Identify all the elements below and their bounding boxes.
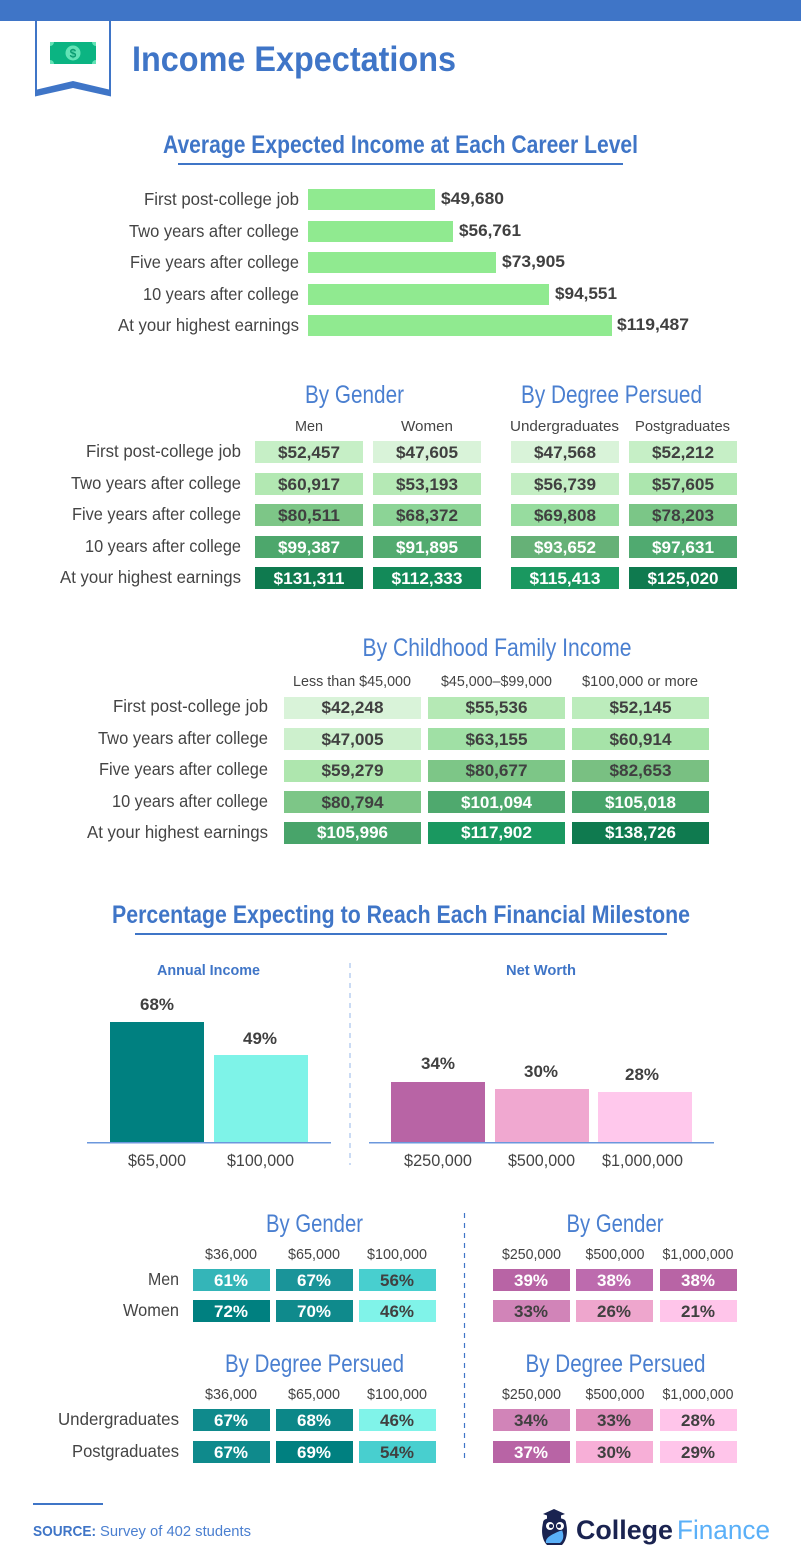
row: women: Women [123,1300,179,1320]
row: first post-college job: First post-college job [86,441,241,461]
row: 10 years after college: $105,018 [605,793,676,812]
column headers: Undergraduates [510,418,619,435]
row: first post-college job: $42,248 [322,698,384,717]
row: postgraduates: 67% [214,1443,248,1462]
bar chart: net worth: 28% [625,1065,659,1084]
bar chart: net worth: $1,000,000 [602,1151,683,1170]
row: at your highest earnings: $112,333 [392,569,462,588]
row: women [123,1300,436,1322]
column headers: degree: $500,000 [586,1386,644,1403]
row: five years after college: $59,279 [322,761,384,780]
heading: by gender: By Gender [266,1210,363,1238]
bar chart: net worth: $250,000 [404,1151,472,1170]
row: first post-college job: $47,605 [396,443,458,462]
bar chart: average expected income [118,189,689,336]
row: five years after college [99,759,709,782]
row: five years after college: Five years after college [72,504,241,524]
row: 10 years after college: $93,652 [534,538,596,557]
column headers: Less than $45,000 [293,673,411,690]
row: postgraduates: Postgraduates [72,1441,179,1461]
row: first post-college job: $55,536 [466,698,528,717]
header bar [0,0,801,21]
bar chart: annual income: 68% [140,995,174,1014]
bar: at your highest earnings [118,315,689,336]
row: at your highest earnings: $115,413 [530,569,600,588]
row: women: 70% [297,1302,331,1321]
column headers [295,418,730,435]
column headers: gender: $65,000 [288,1246,340,1263]
bar: first post-college job [144,189,504,210]
heading: by childhood family income: By Childhood Family Income [362,634,632,662]
row: men: 67% [297,1271,331,1290]
bar chart: annual income: $100,000 [227,1151,294,1170]
table: net worth milestones [493,1210,737,1463]
bar: at your highest earnings: At your highest earnings [118,315,299,335]
row: undergraduates: 46% [380,1411,414,1430]
row: undergraduates: Undergraduates [58,1409,179,1429]
row: undergraduates [493,1409,737,1431]
row: undergraduates: 33% [597,1411,631,1430]
row: undergraduates: 67% [214,1411,248,1430]
row: postgraduates: 69% [297,1443,331,1462]
row: first post-college job: $52,145 [610,698,672,717]
bar chart: net worth: Net Worth [506,963,576,979]
row: women: 72% [214,1302,248,1321]
column headers: gender: $500,000 [586,1246,644,1263]
bar chart: net worth: 30% [524,1062,558,1081]
column headers: gender: $250,000 [502,1246,561,1263]
column headers [293,673,698,690]
row: women: 21% [681,1302,715,1321]
heading: by degree persued: By Degree Persued [225,1350,404,1378]
column headers: degree: $36,000 [205,1386,257,1403]
title: Income Expectations [132,40,456,79]
row: men: 39% [514,1271,548,1290]
table: income by gender and degree [60,381,737,589]
row: 10 years after college: $91,895 [396,538,458,557]
row: five years after college: $80,511 [278,506,340,525]
column headers: Women [401,418,453,435]
column headers: gender: $36,000 [205,1246,257,1263]
row: first post-college job: $52,457 [278,443,340,462]
bar: five years after college: Five years after college [130,252,299,272]
bar: 10 years after college: $94,551 [555,284,617,303]
column headers: degree: $100,000 [367,1386,427,1403]
column headers: Men [295,418,323,435]
logo: CollegeFinance [542,1509,770,1545]
heading: average expected income: Average Expected Income at Each Career Level [163,131,638,159]
bar: two years after college: Two years after college [129,221,299,241]
row: men: 61% [214,1271,248,1290]
row: at your highest earnings: $105,996 [317,823,388,842]
row: five years after college: $82,653 [610,761,672,780]
icon: owl with graduation cap [542,1509,567,1545]
heading: by degree persued: By Degree Persued [526,1350,706,1378]
row: five years after college [72,504,737,526]
column headers: gender [502,1246,734,1263]
row: men: Men [148,1269,179,1289]
row: two years after college: $47,005 [322,730,384,749]
row: at your highest earnings: $138,726 [605,823,676,842]
column headers: gender: $100,000 [367,1246,427,1263]
column headers: $100,000 or more [582,673,698,690]
bar chart: annual income [87,963,331,1170]
logo: CollegeFinance: College [576,1515,673,1545]
row: two years after college [98,728,709,750]
row: first post-college job [113,696,709,719]
row: 10 years after college [112,791,709,813]
bar: first post-college job: First post-college job [144,189,299,209]
bar chart: annual income: 49% [243,1029,277,1048]
row: first post-college job: $47,568 [534,443,596,462]
row: two years after college: Two years after college [71,473,241,493]
row: men [148,1269,436,1291]
row: two years after college: $57,605 [652,475,714,494]
row: undergraduates: 68% [297,1411,331,1430]
bar chart: net worth [369,963,714,1170]
row: postgraduates: 37% [514,1443,548,1462]
bar: five years after college [130,252,565,273]
bar: at your highest earnings: $119,487 [617,315,689,334]
row: postgraduates [493,1441,737,1463]
heading: by gender: By Gender [566,1210,664,1238]
row: two years after college: Two years after college [98,728,268,748]
row: postgraduates: 54% [380,1443,414,1462]
column headers: degree [205,1386,427,1403]
bar: 10 years after college [143,284,617,305]
row: five years after college: Five years after college [99,759,268,779]
row: men [493,1269,737,1291]
row: at your highest earnings [87,822,709,844]
bar: five years after college: $73,905 [502,252,565,271]
row: five years after college: $78,203 [652,506,714,525]
row: 10 years after college: 10 years after college [112,791,268,811]
source note: Survey of 402 students [100,1523,251,1540]
row: two years after college: $56,739 [534,475,596,494]
row: 10 years after college: $97,631 [652,538,714,557]
row: postgraduates: 29% [681,1443,715,1462]
bar: first post-college job: $49,680 [441,189,504,208]
row: 10 years after college: $101,094 [461,793,533,812]
row: five years after college: $80,677 [466,761,528,780]
row: 10 years after college: $80,794 [322,793,384,812]
heading: percentage expecting to reach each financial milestone: Percentage Expecting to Reach Each Financial Milestone [112,901,690,929]
row: postgraduates [72,1441,436,1463]
row: first post-college job [86,441,737,463]
column headers: gender [205,1246,427,1263]
row: women: 26% [597,1302,631,1321]
row: men: 38% [597,1271,631,1290]
row: 10 years after college [85,536,737,558]
bar chart: net worth: $500,000 [508,1151,575,1170]
bar chart: annual income: $65,000 [128,1151,186,1170]
heading: by degree persued: By Degree Persued [521,381,702,409]
row: at your highest earnings: $131,311 [274,569,344,588]
icon: ribbon with dollar bill: $ [70,46,77,60]
source note [33,1503,251,1540]
row: five years after college: $68,372 [396,506,458,525]
row: men: 38% [681,1271,715,1290]
heading: by gender: By Gender [305,381,404,409]
bar chart: annual income: Annual Income [157,963,260,979]
row: first post-college job: $52,212 [652,443,714,462]
row: men: 56% [380,1271,414,1290]
row: at your highest earnings: $117,902 [461,823,532,842]
row: women: 46% [380,1302,414,1321]
row: at your highest earnings: At your highest earnings [60,567,241,587]
bar chart: net worth: 34% [421,1054,455,1073]
column headers: degree: $65,000 [288,1386,340,1403]
row: two years after college: $60,917 [278,475,340,494]
bar: two years after college [129,221,521,242]
row: at your highest earnings: $125,020 [648,569,718,588]
row: two years after college [71,473,737,495]
row: two years after college: $63,155 [466,730,528,749]
column headers: gender: $1,000,000 [662,1246,734,1263]
row: two years after college: $60,914 [610,730,672,749]
row: undergraduates: 28% [681,1411,715,1430]
column headers: $45,000–$99,000 [441,673,552,690]
bar: two years after college: $56,761 [459,221,521,240]
row: two years after college: $53,193 [396,475,458,494]
column headers: Postgraduates [635,418,730,435]
row: undergraduates: 34% [514,1411,548,1430]
row: undergraduates [58,1409,436,1431]
column headers: degree [502,1386,734,1403]
row: postgraduates: 30% [597,1443,631,1462]
logo: CollegeFinance: Finance [677,1515,770,1545]
row: 10 years after college: $99,387 [278,538,340,557]
row: first post-college job: First post-college job [113,696,268,716]
column headers: degree: $1,000,000 [662,1386,734,1403]
row: 10 years after college: 10 years after college [85,536,241,556]
row: five years after college: $69,808 [534,506,596,525]
row: women [493,1300,737,1322]
row: at your highest earnings [60,567,737,589]
icon: ribbon with dollar bill [35,21,111,96]
table: annual income milestones [58,1210,436,1463]
table: income by childhood family income [87,634,709,844]
source note: SOURCE: [33,1523,96,1540]
row: women: 33% [514,1302,548,1321]
column headers: degree: $250,000 [502,1386,561,1403]
row: at your highest earnings: At your highest earnings [87,822,268,842]
bar: 10 years after college: 10 years after college [143,284,299,304]
